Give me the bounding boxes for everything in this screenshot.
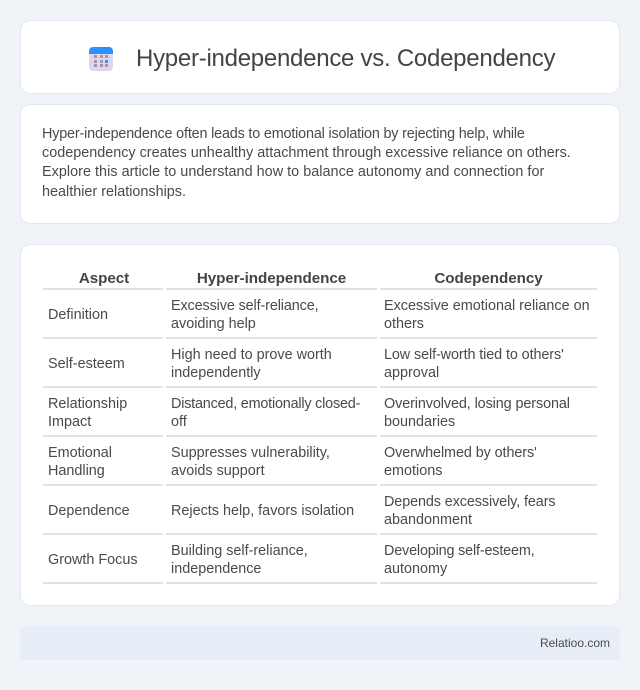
row: Self-esteem: Low self-worth tied to others' — [384, 347, 564, 363]
title: Hyper-independence vs. Codependency — [136, 45, 555, 72]
row: Definition — [48, 298, 590, 332]
row: Growth Focus: Developing self-esteem, — [384, 543, 534, 559]
row: Dependence: Depends excessively, fears — [384, 494, 556, 510]
row: Dependence: abandonment — [384, 512, 472, 528]
row: Emotional Handling: Suppresses vulnerability, — [171, 445, 330, 461]
footer bar — [20, 626, 620, 660]
row: Self-esteem: approval — [384, 365, 439, 381]
row: Definition: avoiding help — [171, 316, 256, 332]
column heading: Aspect: Aspect — [79, 270, 129, 287]
row: Relationship Impact: Overinvolved, losing personal — [384, 396, 570, 412]
row: Relationship Impact: Relationship — [48, 396, 127, 412]
intro text: Hyper-independence often leads to emotional isolation by rejecting help, while — [42, 126, 525, 142]
row: Definition: Excessive emotional reliance on — [384, 298, 590, 314]
row: Growth Focus: independence — [171, 561, 261, 577]
row: Self-esteem — [48, 347, 564, 381]
header panel — [20, 20, 620, 94]
row: Definition: others — [384, 316, 424, 332]
row: Growth Focus: autonomy — [384, 561, 447, 577]
row: Growth Focus: Growth Focus — [48, 552, 138, 568]
column heading: Hyper-independence: Hyper-independence — [197, 270, 346, 287]
intro text: Explore this article to understand how to balance autonomy and connection for — [42, 164, 544, 180]
row: Growth Focus — [48, 543, 534, 577]
row: Definition: Definition — [48, 307, 108, 323]
row: Emotional Handling: Overwhelmed by others' — [384, 445, 537, 461]
row: Growth Focus: Building self-reliance, — [171, 543, 308, 559]
row: Dependence: Dependence — [48, 503, 130, 519]
row: Emotional Handling: emotions — [384, 463, 442, 479]
row: Emotional Handling — [48, 445, 537, 479]
row: Definition: Excessive self-reliance, — [171, 298, 318, 314]
row: Self-esteem: independently — [171, 365, 261, 381]
icon: calendar — [89, 47, 113, 71]
row: Relationship Impact: off — [171, 414, 187, 430]
intro text: codependency creates unhealthy attachment through excessive reliance on others. — [42, 145, 571, 161]
intro text — [42, 126, 571, 200]
intro panel — [20, 104, 620, 224]
row: Self-esteem: Self-esteem — [48, 356, 125, 372]
row: Emotional Handling: Emotional — [48, 445, 112, 461]
intro text: healthier relationships. — [42, 184, 186, 200]
row: Relationship Impact: Impact — [48, 414, 91, 430]
table panel — [20, 244, 620, 606]
row: Relationship Impact — [48, 396, 570, 430]
footer text: Relatioo.com — [540, 636, 610, 650]
row: Emotional Handling: Handling — [48, 463, 105, 479]
column heading: Codependency: Codependency — [434, 270, 543, 287]
row: Dependence: Rejects help, favors isolation — [171, 503, 354, 519]
row: Emotional Handling: avoids support — [171, 463, 265, 479]
row: Dependence — [48, 494, 556, 528]
row: Relationship Impact: boundaries — [384, 414, 455, 430]
row: Self-esteem: High need to prove worth — [171, 347, 332, 363]
row: Relationship Impact: Distanced, emotionally closed- — [171, 396, 360, 412]
